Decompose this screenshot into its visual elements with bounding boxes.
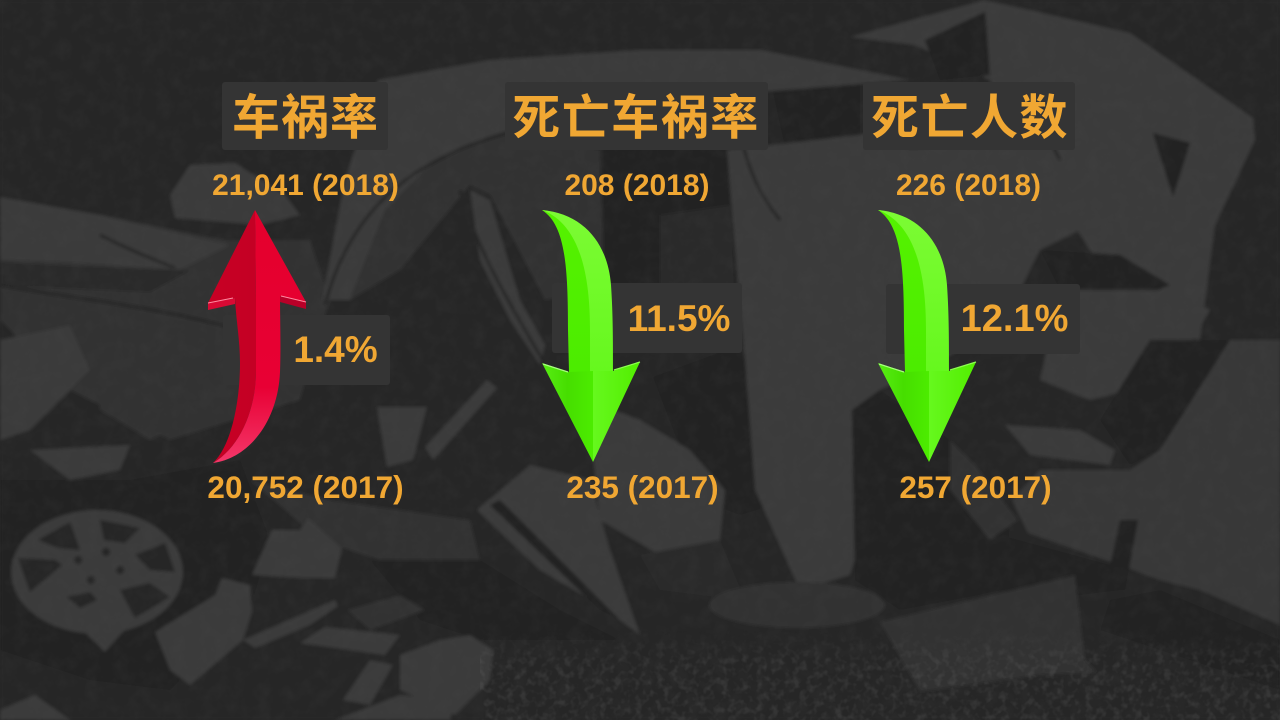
gravel and debris texture bbox=[480, 643, 1280, 720]
heading box: 死亡车祸率: 死亡车祸率 bbox=[512, 92, 760, 145]
change: 12.1%: 12.1% bbox=[961, 298, 1068, 340]
change: 11.5%: 11.5% bbox=[628, 298, 730, 339]
icon: green down arrow bbox=[542, 210, 640, 462]
value: 2018 crashes: 21,041 (2018) bbox=[212, 169, 399, 202]
value: 2017 fatal crashes: 235 (2017) bbox=[566, 469, 719, 505]
value: 2018 fatal crashes: 208 (2018) bbox=[564, 169, 710, 202]
heading box: 车祸率: 车祸率 bbox=[232, 92, 379, 145]
column: 死亡车祸率 bbox=[505, 82, 768, 505]
change: 1.4%: 1.4% bbox=[293, 329, 378, 370]
change: 1.4% bbox=[223, 315, 390, 385]
value: 2018 deaths: 226 (2018) bbox=[896, 169, 1041, 202]
change: 12.1% bbox=[886, 284, 1080, 354]
column: 死亡人数 bbox=[863, 82, 1080, 505]
column: 车祸率 bbox=[207, 82, 404, 505]
icon: green down arrow bbox=[878, 210, 976, 462]
heading box: 车祸率 bbox=[222, 82, 388, 150]
heading box: 死亡人数: 死亡人数 bbox=[871, 92, 1069, 145]
icon: red up arrow bbox=[208, 210, 306, 463]
value: 2017 deaths: 257 (2017) bbox=[899, 469, 1052, 505]
value: 2017 crashes: 20,752 (2017) bbox=[207, 469, 404, 505]
change: 11.5% bbox=[552, 283, 742, 353]
